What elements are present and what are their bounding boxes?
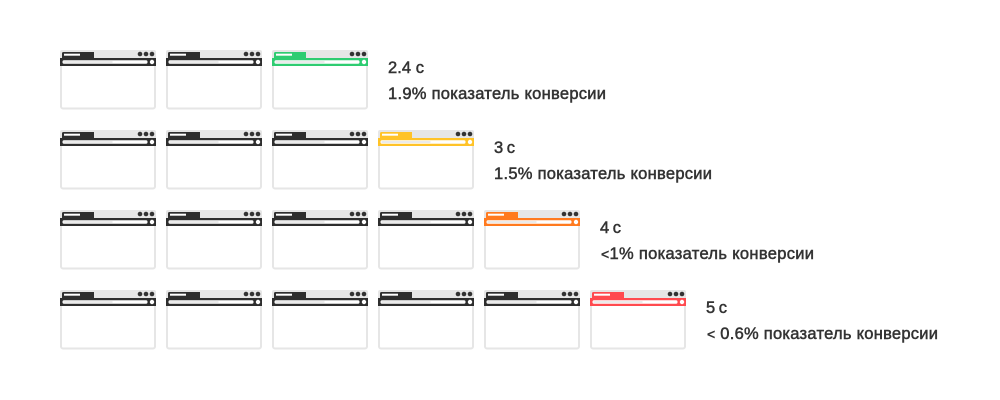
conversion rate label: < 0.6% показатель конверсии	[707, 325, 938, 343]
browser window 2	[166, 291, 262, 348]
browser window: orange	[484, 211, 580, 268]
browser window: yellow	[378, 131, 474, 188]
load time label: 4 с	[600, 219, 621, 237]
row: 3 seconds	[60, 131, 712, 188]
load time label: 2.4 с	[388, 59, 424, 77]
load time label: 3 с	[494, 139, 515, 157]
browser window 1	[60, 131, 156, 188]
browser window 4	[378, 291, 474, 348]
conversion rate label: 1.5% показатель конверсии	[494, 165, 712, 183]
browser window 5	[484, 291, 580, 348]
browser window 2	[166, 51, 262, 108]
browser window 1	[60, 291, 156, 348]
browser window 3	[272, 291, 368, 348]
browser window 1	[60, 211, 156, 268]
browser window 4	[378, 211, 474, 268]
row: 2.4 seconds	[60, 51, 606, 108]
load time label: 5 с	[706, 299, 727, 317]
browser window: red	[590, 291, 686, 348]
browser window: green	[272, 51, 368, 108]
browser window 2	[166, 211, 262, 268]
browser window 3	[272, 211, 368, 268]
row: 5 seconds	[60, 291, 938, 348]
row: 4 seconds	[60, 211, 814, 268]
conversion rate label: <1% показатель конверсии	[601, 245, 814, 263]
conversion rate label: 1.9% показатель конверсии	[388, 85, 606, 103]
browser window 2	[166, 131, 262, 188]
browser window 3	[272, 131, 368, 188]
browser window 1	[60, 51, 156, 108]
